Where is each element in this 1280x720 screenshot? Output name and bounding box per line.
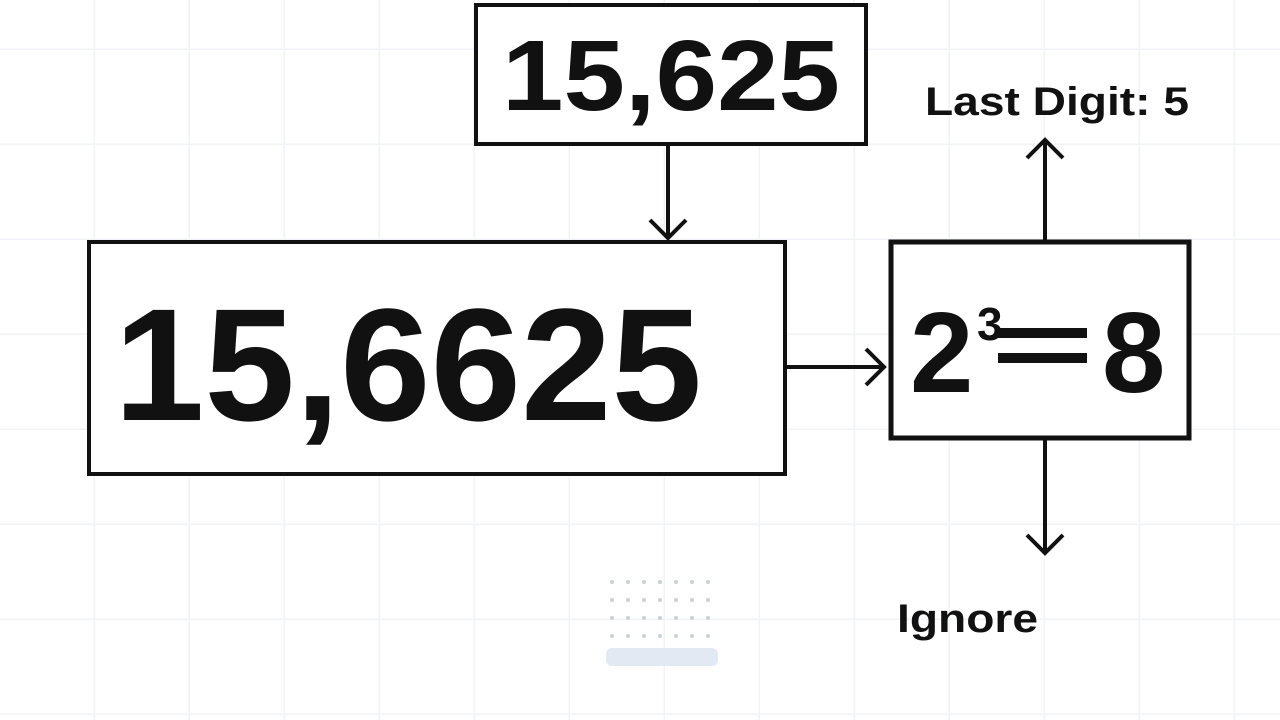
main box: 15,6625 <box>89 242 785 474</box>
arrow: up to last digit <box>1027 140 1063 240</box>
exponent box: 2^3 = 8 <box>891 242 1189 438</box>
arrow: down to ignore <box>1027 439 1063 553</box>
label: Ignore: Ignore <box>897 597 1038 641</box>
arrow: top box to main box <box>650 144 686 238</box>
label: Last Digit: 5: Last Digit: 5 <box>925 80 1189 124</box>
exponent box: 2^3 = 8: 2 <box>910 290 973 417</box>
decorative dot pattern <box>606 580 718 666</box>
top box: 15,625 <box>476 5 866 144</box>
arrow: main box to exponent box <box>786 349 884 385</box>
top box: 15,625: 15,625 <box>502 20 840 132</box>
exponent box: 2^3 = 8: 3 <box>977 298 1003 350</box>
exponent box: 2^3 = 8: 8 <box>1102 290 1165 417</box>
main box: 15,6625: 15,6625 <box>114 275 702 454</box>
